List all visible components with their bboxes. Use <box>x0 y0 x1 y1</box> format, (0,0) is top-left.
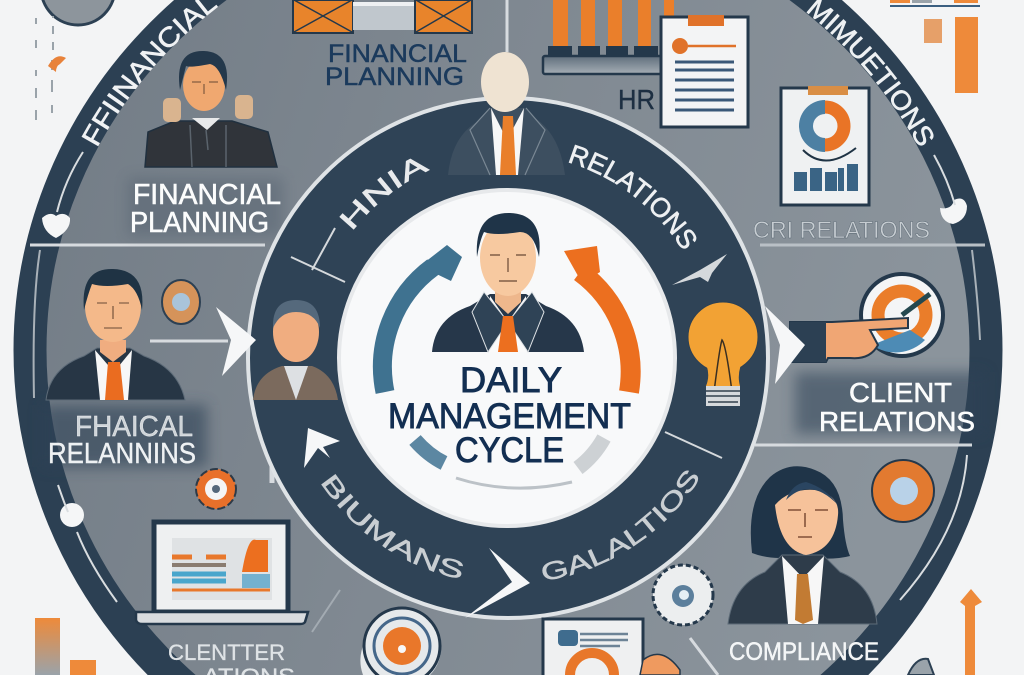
heading: compliance: COMPLIANCE <box>729 638 879 666</box>
cycle arrow: blue <box>382 245 462 392</box>
arrow: bottom of inner ring <box>465 548 530 618</box>
label shade: top-left <box>128 178 283 236</box>
heading: client relations <box>819 377 975 437</box>
heading: client relations: CLIENT <box>849 377 952 408</box>
icon: white gear <box>653 565 713 625</box>
person: woman <box>728 466 877 624</box>
title: CYCLE <box>455 431 564 470</box>
person: left <box>46 269 185 400</box>
bottom-right arrow <box>908 589 982 675</box>
person: top left <box>145 51 277 167</box>
heading: CR relations: CRI RELATIONS <box>753 217 930 244</box>
inner ring label: bottom right: GALALTIOS <box>542 470 698 580</box>
cycle arrow: orange <box>564 246 631 392</box>
heading: financial planning left <box>130 179 281 239</box>
icon: orange donut <box>872 460 934 522</box>
heading: HR: HR <box>618 84 655 115</box>
icon: small badge <box>162 280 200 324</box>
icon: report with hand <box>543 619 680 675</box>
heading: client relations: RELATIONS <box>819 406 975 437</box>
ring marker: heart right <box>940 198 967 224</box>
heading: financial planning top: PLANNING <box>325 63 464 91</box>
cycle arc: grey lower <box>578 438 604 468</box>
icon: orange gear <box>196 469 236 509</box>
icon: bottom target <box>360 608 441 675</box>
inner ring tick: star top right <box>672 254 727 285</box>
top-right bars <box>890 0 980 93</box>
person: top center <box>448 52 565 175</box>
title: DAILY <box>460 361 562 400</box>
inner ring label: top left: HNIA <box>339 158 430 230</box>
arrow: left into inner ring <box>216 307 256 376</box>
icon: bar columns <box>543 0 674 74</box>
heading: clienter ations: CLENTTER <box>168 640 285 665</box>
heading: financial planning top <box>325 40 467 91</box>
presenter: center figure <box>432 213 584 352</box>
icon: target with pointing hand <box>790 274 943 362</box>
heading: financial relations left: RELANNINS <box>48 438 196 470</box>
inner ring tick: top left <box>291 228 345 282</box>
title <box>388 361 631 470</box>
center circle <box>339 190 675 526</box>
arrow: right out of inner ring <box>765 306 805 384</box>
label shade: right <box>795 372 985 434</box>
icon: chart clipboard <box>781 86 869 205</box>
cycle arc: blue lower <box>415 440 444 463</box>
heading: financial planning left: PLANNING <box>130 207 269 239</box>
icon: clipboard document <box>661 15 748 127</box>
icon: laptop <box>136 522 308 624</box>
ring marker: dot lower left <box>60 503 84 527</box>
heading: financial relations left <box>48 411 196 470</box>
heading: clienter ations <box>168 640 295 675</box>
icon: envelopes <box>293 0 472 33</box>
label shade: left <box>42 405 207 467</box>
heading: financial relations left: FHAICAL <box>75 411 193 443</box>
inner ring tick: bottom right <box>665 432 722 458</box>
arrow: up-left on inner ring <box>304 428 340 468</box>
top-left corner decoration <box>36 0 115 120</box>
person: inner left <box>253 300 338 400</box>
icon: lightbulb <box>688 302 758 406</box>
heading: financial planning left: FINANCIAL <box>133 179 281 211</box>
heading: financial planning top: FINANCIAL <box>328 40 467 68</box>
inner ring label: top right: RELATIONS <box>568 144 696 249</box>
inner ring label: bottom left: BIUMANS <box>321 474 463 578</box>
inner dark ring <box>246 96 770 620</box>
ring marker: heart left <box>42 214 70 238</box>
bottom-left bars <box>35 618 96 675</box>
cycle arc: grey base <box>456 478 572 488</box>
title: MANAGEMENT <box>388 397 631 436</box>
